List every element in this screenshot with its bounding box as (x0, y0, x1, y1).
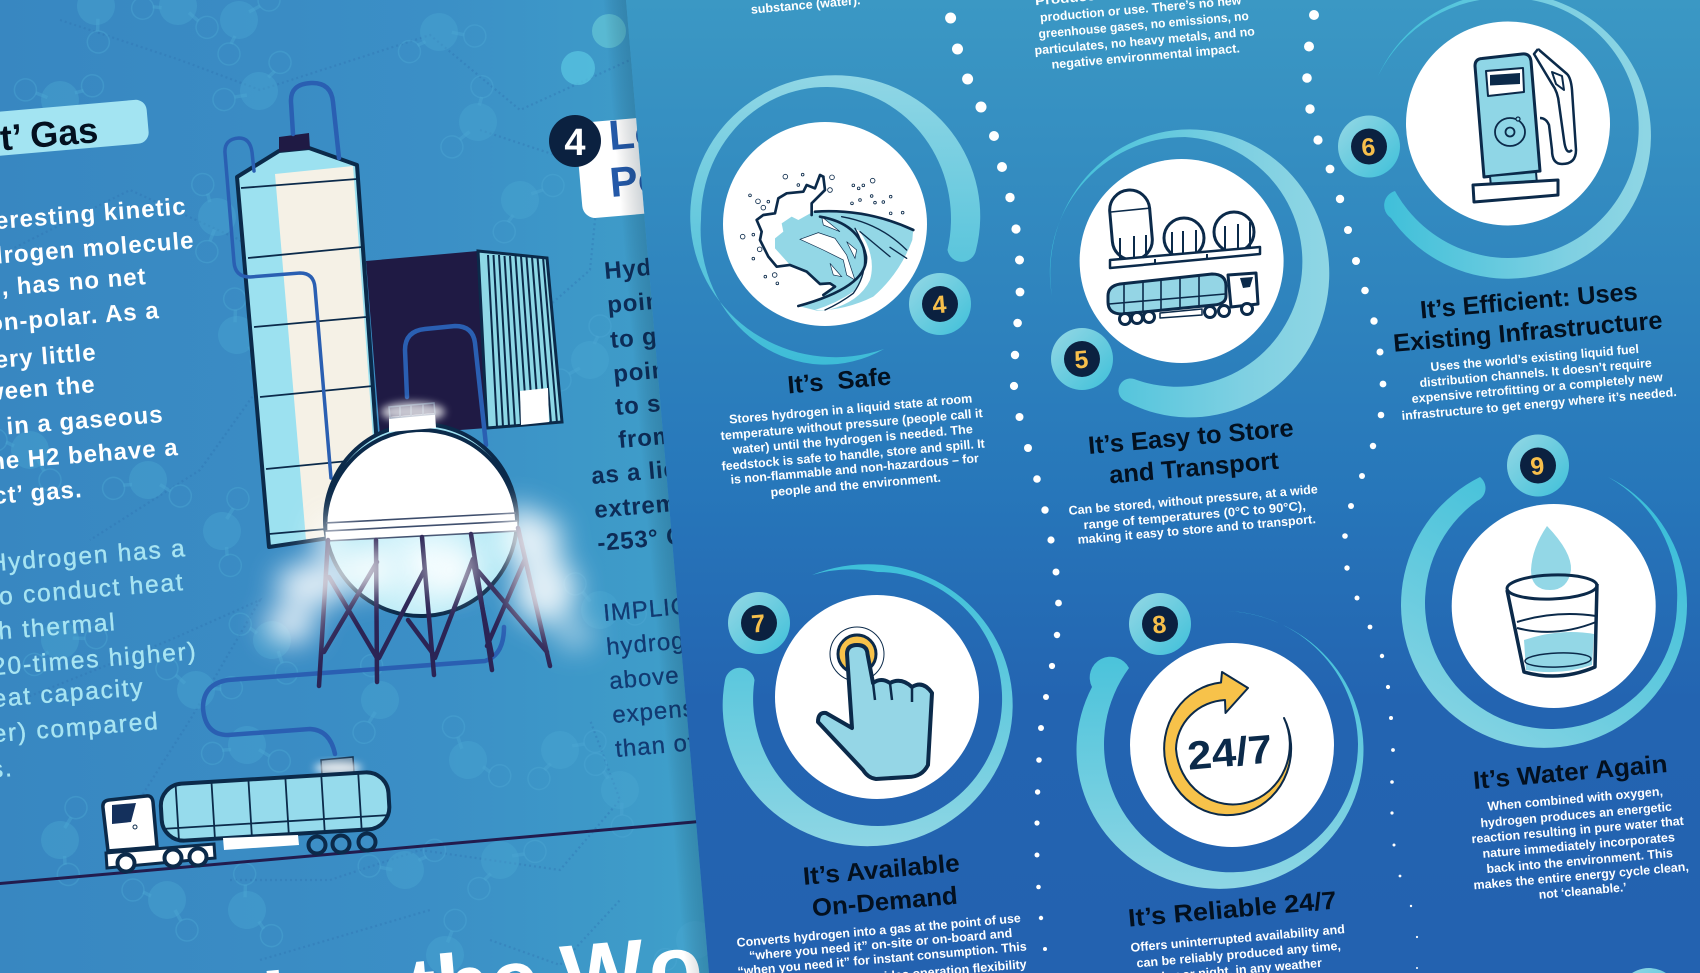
sphere legs (319, 528, 550, 686)
body text: feedstock is safe to handle, store and spill. It (721, 436, 986, 473)
dotted path: column divider one (945, 12, 1062, 951)
text block: boiling point (clipped): extreme (593, 489, 693, 524)
body text (1068, 482, 1318, 547)
heading pill: ideal gas: t’ Gas (0, 109, 100, 159)
progress ring (723, 564, 1013, 846)
body text (1130, 922, 1345, 973)
white circle (1406, 22, 1610, 226)
heading (1392, 278, 1664, 358)
text block: item 3 zero emissions: negative environmental impact. (1051, 41, 1240, 72)
heading: It’s Efficient: Uses (1419, 278, 1639, 324)
illustration: storage plant (203, 83, 595, 754)
heading: and Transport (1108, 447, 1280, 489)
progress ring (1378, 0, 1651, 279)
page fold shadow (600, 0, 709, 973)
body text: When combined with oxygen, (1487, 784, 1663, 814)
text block: boiling point (clipped) (590, 248, 723, 557)
heading pill: low boiling point: Lo (607, 108, 662, 159)
body text (1401, 342, 1677, 423)
number badge 9: 9 (1529, 452, 1545, 481)
icon: circular arrow (1164, 672, 1291, 815)
big title, bottom of left page (259, 903, 842, 973)
body text: distribution channels. It doesn’t require (1419, 356, 1652, 390)
24/7 label: 24/7 (1186, 727, 1274, 779)
number badge 5: 5 (1073, 345, 1090, 375)
text block: implications (clipped): IMPLICATIONS (602, 584, 783, 627)
text block: boiling point (clipped): from (617, 422, 676, 454)
body text: Offers uninterrupted availability and (1130, 922, 1345, 955)
number badge 4: 4 (931, 290, 948, 320)
text block: implications (clipped): expensive (611, 692, 730, 729)
text block: implications (clipped): hydrogen (605, 625, 715, 661)
ground line (0, 821, 705, 884)
body text: temperature without pressure (people call it (720, 406, 984, 443)
body text: range of temperatures (0°C to 90°C), (1083, 499, 1306, 532)
tower (237, 133, 383, 547)
body text: nature immediately incorporates (1482, 830, 1675, 861)
white circle (1130, 643, 1334, 847)
illustration: tanker truck (103, 757, 391, 872)
panel: item 4 It's Safe (690, 75, 986, 499)
text block: implications (clipped) (602, 584, 783, 763)
panel: item 5 Easy to Store and Transport (1050, 129, 1329, 547)
number badge 4 (909, 273, 971, 335)
body text: expensive retrofitting or a completely new (1411, 370, 1664, 406)
body text (736, 911, 1027, 973)
heading pill: ideal gas (0, 99, 150, 159)
body text: reaction resulting in pure water that (1471, 814, 1685, 846)
text block: implications for heat (0, 535, 198, 785)
tank (160, 771, 391, 842)
heading: It’s Available (802, 849, 961, 891)
white circle (1080, 159, 1284, 363)
heading: Existing Infrastructure (1392, 306, 1664, 358)
text block: boiling point (clipped): -253° C (596, 522, 685, 557)
heading: It’s Easy to Store (1087, 414, 1295, 460)
cab (103, 796, 157, 851)
dotted path: column divider two (1302, 10, 1418, 969)
icon: breaking wave (740, 173, 913, 311)
number badge 5 (1051, 328, 1113, 390)
icon: storage tanks and truck (1108, 188, 1260, 324)
body text: makes the entire energy cycle clean, (1473, 860, 1689, 892)
number badge 9 (1507, 434, 1569, 496)
body text: “where you need it” on-site or on-board and (749, 926, 1013, 963)
body text: Can be stored, without pressure, at a wide (1068, 482, 1318, 518)
number badge 8: 8 (1151, 610, 1168, 640)
body text: is non-flammable and non-hazardous – for (730, 451, 979, 487)
body text: hydrogen produces an energetic (1480, 800, 1672, 830)
heading: It’s Safe (786, 363, 892, 400)
white circle (723, 122, 927, 326)
body text: infrastructure to get energy where it’s needed. (1401, 385, 1677, 423)
white circle (1452, 504, 1656, 708)
text block: boiling point (clipped): as a liquid (590, 452, 718, 490)
progress ring (690, 75, 980, 365)
number badge 8 (1129, 593, 1191, 655)
number badge 6 (1338, 116, 1400, 178)
body text: back into the environment. This (1486, 846, 1673, 876)
heading: It’s Reliable 24/7 (1127, 886, 1338, 933)
next item badge, cropped at bottom edge (1618, 968, 1680, 973)
text block: implications (clipped): above (608, 662, 681, 695)
text block: implications (clipped): than other (614, 726, 734, 763)
molecule background pattern (0, 0, 746, 973)
panel: left page background (0, 0, 720, 973)
number badge: 4 on left page: 4 (564, 122, 586, 164)
number badge: 4 on left page (549, 115, 601, 167)
text block: boiling point (clipped): point (612, 356, 677, 388)
heading (802, 849, 961, 922)
icon: fuel pump (1473, 49, 1576, 202)
text block: ideal gas explanation (0, 193, 195, 510)
body text (720, 391, 986, 499)
steam at tank top (381, 402, 445, 422)
sphere tank (320, 403, 522, 621)
vapour clouds (264, 504, 595, 649)
text block: item 3 zero emissions: greenhouse gases, no emissions, no (1038, 9, 1250, 41)
body text (1471, 784, 1689, 902)
pipes (203, 83, 504, 754)
building with louvred panel (366, 251, 562, 436)
number badge 7: 7 (750, 609, 766, 639)
panel: item 9 Water Again (1401, 434, 1689, 902)
icon: pointing hand (818, 627, 932, 779)
white circle (775, 595, 979, 799)
heading: It’s Water Again (1472, 750, 1669, 795)
progress ring (1401, 477, 1687, 748)
body text: making it easy to store and to transport. (1077, 512, 1316, 547)
text block: item 3 zero emissions (1034, 0, 1256, 72)
progress ring (1050, 129, 1329, 417)
icon: water drop and glass (1507, 526, 1597, 676)
panel: right page background (626, 0, 1700, 973)
heading pill: low boiling point: Po (608, 154, 665, 206)
text block: boiling point (clipped): to go (609, 322, 674, 354)
chassis (106, 844, 215, 868)
body text: can be reliably produced any time, (1136, 939, 1341, 970)
number badge 6: 6 (1360, 133, 1376, 162)
number badge 7 (728, 592, 790, 654)
wheels (118, 834, 376, 872)
progress ring (1077, 611, 1364, 889)
body text: water) until the hydrogen is needed. The (731, 422, 973, 457)
panel: item 8 Reliable 24/7 (1077, 593, 1364, 973)
panel: item 7 Available On-Demand (723, 564, 1027, 973)
text block: boiling point (clipped): Hydrogen (603, 248, 723, 285)
body text: people and the environment. (770, 471, 941, 499)
panel: item 6 Efficient (1338, 0, 1677, 423)
body text: Converts hydrogen into a gas at the point of use (736, 911, 1021, 950)
text block: item 3 zero emissions: particulates, no heavy metals, and no (1034, 24, 1256, 58)
heading: On-Demand (811, 882, 959, 922)
body text: Uses the world’s existing liquid fuel (1430, 342, 1639, 374)
heading (1087, 414, 1295, 489)
body text: not ‘cleanable.’ (1538, 880, 1627, 902)
body text: Stores hydrogen in a liquid state at room (729, 391, 973, 427)
heading pill: low boiling point (575, 108, 703, 219)
text block: boiling point (clipped): point (606, 287, 671, 319)
text block: boiling point (clipped): to sol (614, 388, 685, 421)
